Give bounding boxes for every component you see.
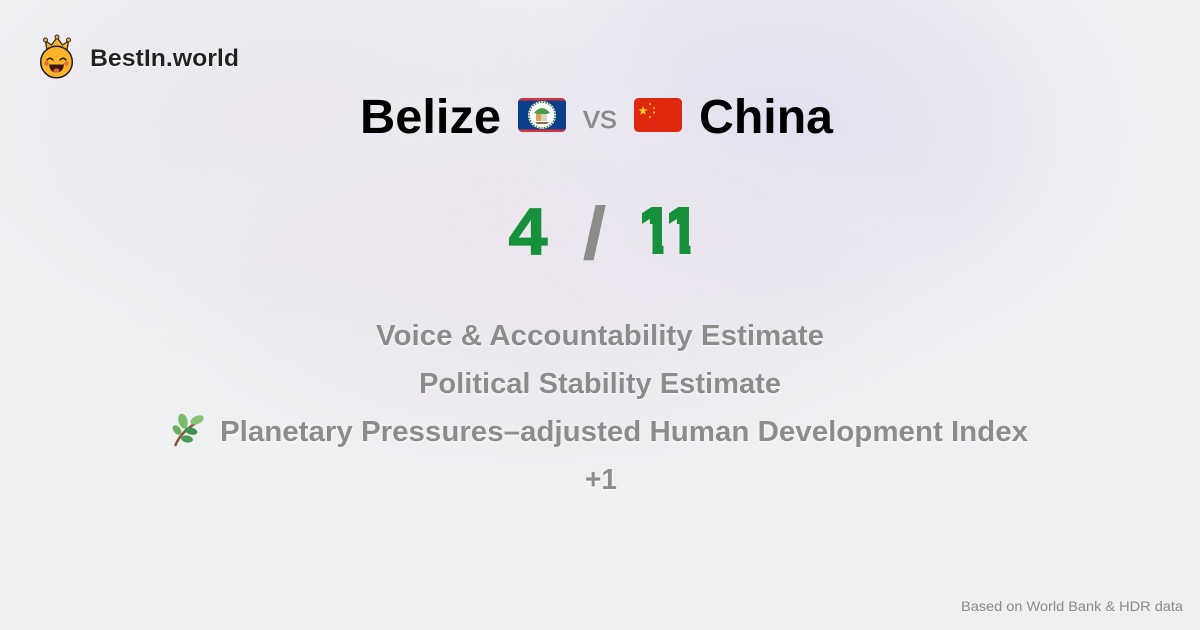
icon: China flag [634, 98, 682, 132]
indicator: more count: +1 [585, 464, 617, 496]
Belize score: 4 [508, 194, 548, 268]
indicator: voice and accountability: Voice & Accountability Estimate [376, 320, 824, 352]
icon: crown smiley [41, 35, 72, 78]
indicator: political stability: Political Stability Estimate [419, 368, 781, 400]
score: 4 / 11 [508, 205, 690, 260]
Belize label: Belize [360, 91, 501, 144]
indicator: planetary pressures HDI: Planetary Pressures–adjusted Human Development Index [220, 416, 1028, 448]
brand name: BestIn.world [90, 45, 239, 72]
China label: China [699, 91, 833, 144]
vs label: vs [583, 99, 617, 135]
source note: Based on World Bank & HDR data [961, 598, 1183, 614]
title: Belize vs China [363, 98, 834, 134]
China score: 11 [636, 194, 700, 268]
separator: / [582, 192, 606, 275]
logo: BestIn.world [41, 35, 239, 78]
icon: Belize flag [518, 98, 566, 132]
list of indicators [171, 320, 1028, 496]
icon: herb branch [171, 413, 205, 445]
